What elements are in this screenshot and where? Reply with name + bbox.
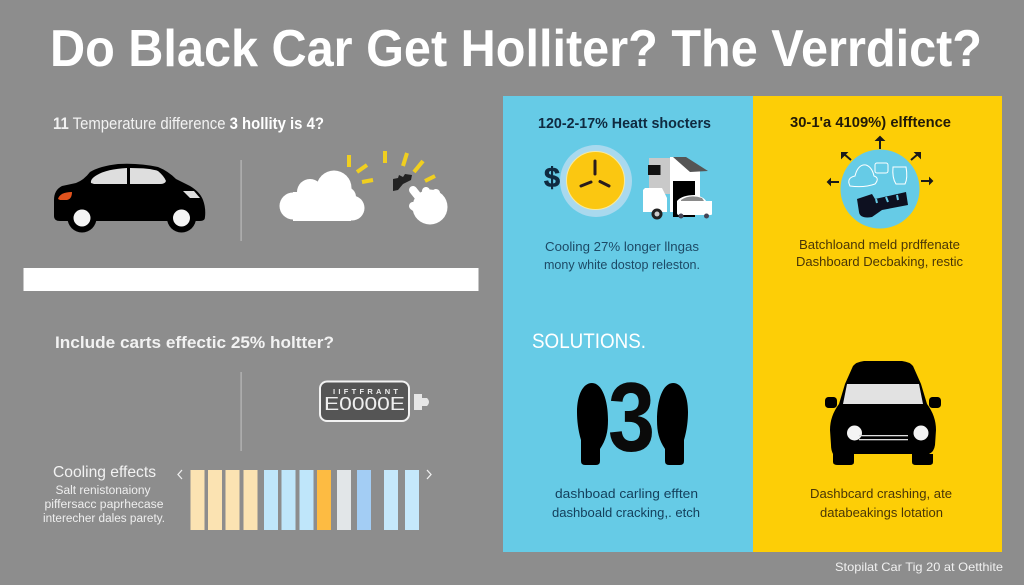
- icon: garage with vehicles: [643, 157, 712, 220]
- heading: include carts: Include carts effectic 25% holtter?: [55, 333, 334, 352]
- panel: yellow column background: [753, 96, 1002, 552]
- caption: cooling longer: Cooling 27% longer llngas: [545, 239, 700, 254]
- icon: display gauge: E0000E: [324, 394, 405, 414]
- heading: solutions: SOLUTIONS.: [532, 330, 646, 353]
- text: cooling effects: piffersacc paprhecase: [44, 499, 164, 511]
- heading: heat shockers: 120-2-17% Heatt shocters: [538, 115, 711, 132]
- caption: dashboard carling: dashboad carling efften: [555, 486, 698, 501]
- icon: pointing hand: [393, 174, 448, 224]
- caption: dashboard crashing: [810, 486, 952, 520]
- panel: dashboard crashing: [810, 361, 952, 520]
- white bar: [24, 268, 478, 291]
- text: cooling effects: [43, 464, 165, 525]
- panel: cooling effects: [43, 333, 431, 530]
- icon: number three with footprints: [577, 362, 688, 472]
- icon: number three with footprints: 3: [608, 362, 655, 472]
- chart: bars: [178, 470, 431, 530]
- icon: fan in yellow circle: [560, 145, 632, 217]
- text: cooling effects: Cooling effects: [53, 464, 156, 481]
- icon: black car front view: [825, 361, 941, 465]
- icons: outward arrows: [828, 137, 932, 184]
- icon: yellow sun rays: [349, 151, 435, 182]
- title: Do Black Car Get Holliter? The Verrdict?: [50, 20, 982, 78]
- caption: dashboard carling: dashboald cracking,. etch: [552, 505, 700, 520]
- panel: efficiency: [790, 114, 963, 269]
- caption: cooling longer: [544, 239, 700, 272]
- heading: temperature difference: 11 Temperature difference 3 hollity is 4?: [53, 114, 324, 133]
- panel: heat shockers: [538, 115, 712, 272]
- icon: blue circle with dashboard symbols: [840, 150, 920, 228]
- icon: display gauge: IIFTFRANT: [333, 387, 398, 396]
- caption: batchload: Dashboard Decbaking, restic: [796, 254, 963, 269]
- panel: solutions: [532, 330, 700, 520]
- text: cooling effects: Salt renistonaiony: [56, 485, 151, 497]
- footer credit: Stopilat Car Tig 20 at Oetthite: [835, 560, 1003, 574]
- icon: black car side view: [54, 164, 205, 232]
- heading: efficiency: 30-1'a 4109%) elfftence: [790, 114, 951, 131]
- panel: temperature difference: [24, 114, 478, 291]
- panel: blue column background: [503, 96, 753, 552]
- caption: cooling longer: mony white dostop releston.: [544, 257, 700, 272]
- caption: batchload: Batchloand meld prdffenate: [799, 237, 960, 252]
- caption: dashboard crashing: Dashbcard crashing, ate: [810, 486, 952, 501]
- text: cooling effects: interecher dales parety.: [43, 513, 165, 525]
- icon: cloud: [280, 170, 364, 221]
- icon: dollar sign: $: [544, 162, 560, 193]
- caption: dashboard crashing: databeakings lotation: [820, 505, 943, 520]
- caption: dashboard carling: [552, 486, 700, 520]
- icon: display gauge: [320, 382, 429, 421]
- caption: batchload: [796, 237, 963, 269]
